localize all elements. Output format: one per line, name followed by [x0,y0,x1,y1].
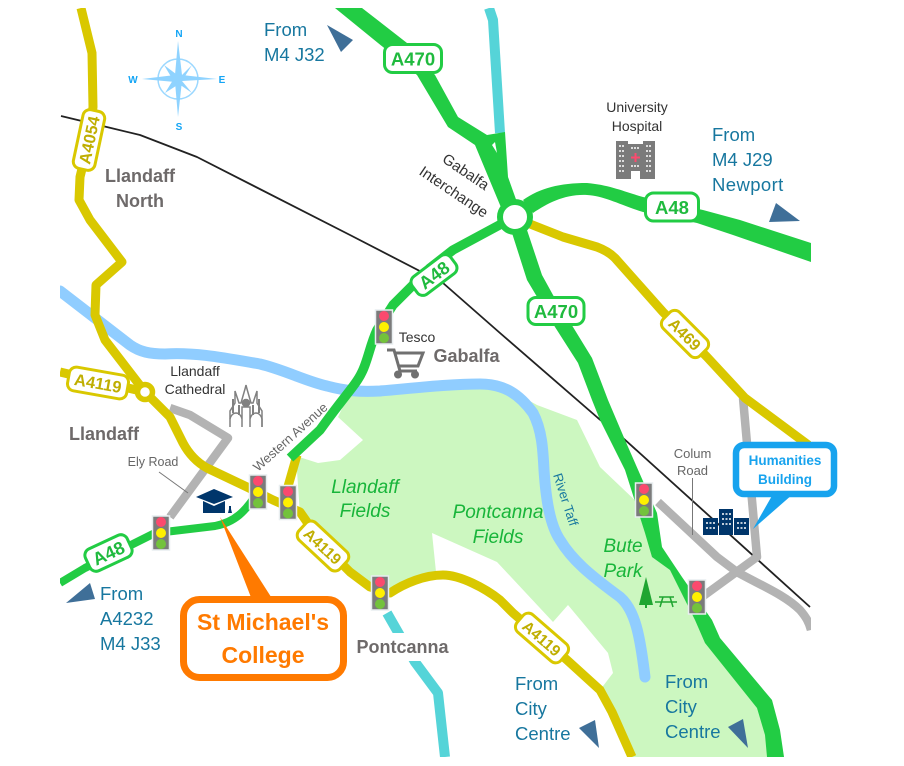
leader line: Colum Road [692,478,694,535]
road label: A4119 centre [294,518,352,574]
area labels: Gabalfa [433,346,500,366]
yellow link to Llandaff Fields [287,455,297,490]
label: Gabalfa Interchange: Gabalfa [439,151,493,194]
road label: A4119 west: A4119 [73,371,123,397]
park labels: Park [603,561,644,582]
callout: Humanities Building [736,445,834,529]
grey road: Ely Road [170,408,228,517]
traffic light: Ely Road [152,516,170,550]
heading: from city centre west: Centre [515,723,571,744]
road label: A4119 centre: A4119 [300,526,344,569]
callout: Humanities Building: Building [758,472,812,487]
river tributary south [387,613,445,757]
icon: buildings [703,509,749,535]
compass letters [128,29,226,133]
heading: from M4 J29: Newport [712,174,784,195]
label backing for Pontcanna [355,633,451,661]
leader line: Ely Road [159,472,188,493]
road label: A48 west: A48 [90,537,128,569]
road label: A470 south [528,298,584,324]
callout: Humanities Building: Humanities [749,453,821,468]
landmark labels: Cathedral [165,381,225,397]
icon: tree [639,577,653,608]
park labels: Fields [340,501,391,522]
heading: from M4 J32: From [264,19,307,40]
compass letters: S [176,122,183,133]
heading: from city centre east: Centre [665,721,721,742]
compass letters: E [219,75,226,86]
green road A470 south [500,205,784,757]
heading: from city centre east: City [665,696,698,717]
landmark labels: Hospital [612,118,662,134]
road label: A48 centre [408,252,460,298]
gap between A470 carriageways [492,142,497,153]
area labels: North [116,191,164,211]
park labels [331,477,644,582]
landmark labels: University [606,99,668,115]
area labels: Pontcanna [356,637,449,657]
river taff [60,291,645,677]
park labels: Pontcanna [453,502,543,523]
road label: A4119 south: A4119 [519,618,564,660]
heading: from M4 J32: M4 J32 [264,44,325,65]
label: River Taff: River Taff [550,471,581,528]
road label: A469: A469 [664,316,704,355]
green road A48 west [290,222,505,458]
landmark labels: Llandaff [170,363,220,379]
traffic light: Bute Park south [688,580,706,614]
heading: from city centre east: From [665,671,708,692]
label: Colum Road: Road [677,463,708,478]
river tributary north [489,8,500,133]
road label: A4119 west [66,366,130,400]
traffic light: Bute Park north [636,483,652,517]
callout: St Michael's College: St Michael's [197,609,329,635]
traffic light: Pontcanna [372,576,388,610]
area labels [69,166,500,657]
callout: St Michael's College: College [221,642,305,668]
traffic light: Gabalfa [376,310,392,344]
icon: picnic table [655,597,677,607]
yellow road A4119 west [60,372,145,392]
area labels: Llandaff [105,166,176,186]
road label: A48 east: A48 [655,197,689,218]
icon: cathedral [230,385,262,427]
road label: A470 north: A470 [391,48,435,70]
green road A48 east [523,183,811,262]
icon: graduation cap [196,489,233,513]
icon: compass rose [142,41,217,117]
heading: from city centre west: From [515,673,558,694]
yellow road A4054 and A4119 [79,8,632,757]
callout: St Michael's College [184,517,344,678]
compass letters: W [128,75,138,86]
road label: A48 east [646,193,698,221]
heading: from M4 J29: M4 J29 [712,149,773,170]
area labels: Llandaff [69,424,140,444]
park labels: Fields [473,527,524,548]
small roundabout [138,384,152,400]
road label: A470 north [384,44,442,72]
road label: A469 [658,307,712,361]
label: Colum Road: Colum [674,446,711,461]
heading: from city centre west: City [515,698,548,719]
heading: from A4232: From [100,583,143,604]
label: Ely Road: Ely Road [128,455,178,469]
park labels: Bute [603,536,643,557]
compass letters: N [175,29,183,40]
landmark labels: Tesco [399,329,435,345]
roundabout [500,202,530,232]
road label: A48 west [83,532,134,574]
heading: from A4232: M4 J33 [100,633,161,654]
arrows: direction triangles [66,25,800,748]
traffic light: Llandaff Fields [280,486,296,520]
park labels: Llandaff [331,477,401,498]
road label: A470 south: A470 [534,301,578,322]
road label: A4054 [72,108,106,172]
green road A470 north [335,8,518,205]
label: Gabalfa Interchange: Interchange [416,163,491,221]
road label: A4054: A4054 [76,114,104,166]
heading: from M4 J29: From [712,124,755,145]
label: Western Avenue: Western Avenue [250,400,331,474]
heading: from A4232: A4232 [100,608,154,629]
railway line [61,116,810,607]
road label: A4119 south [513,610,571,666]
grey road: Colum Road [658,502,811,630]
park: green fields [296,384,775,757]
road label: A48 centre: A48 [415,257,454,293]
yellow road A469 [525,222,811,447]
icon: hospital [616,141,655,179]
traffic light: Western Avenue [250,475,266,509]
icon: shopping cart [387,350,423,377]
landmark labels [165,99,668,397]
grey road: link [702,398,757,597]
